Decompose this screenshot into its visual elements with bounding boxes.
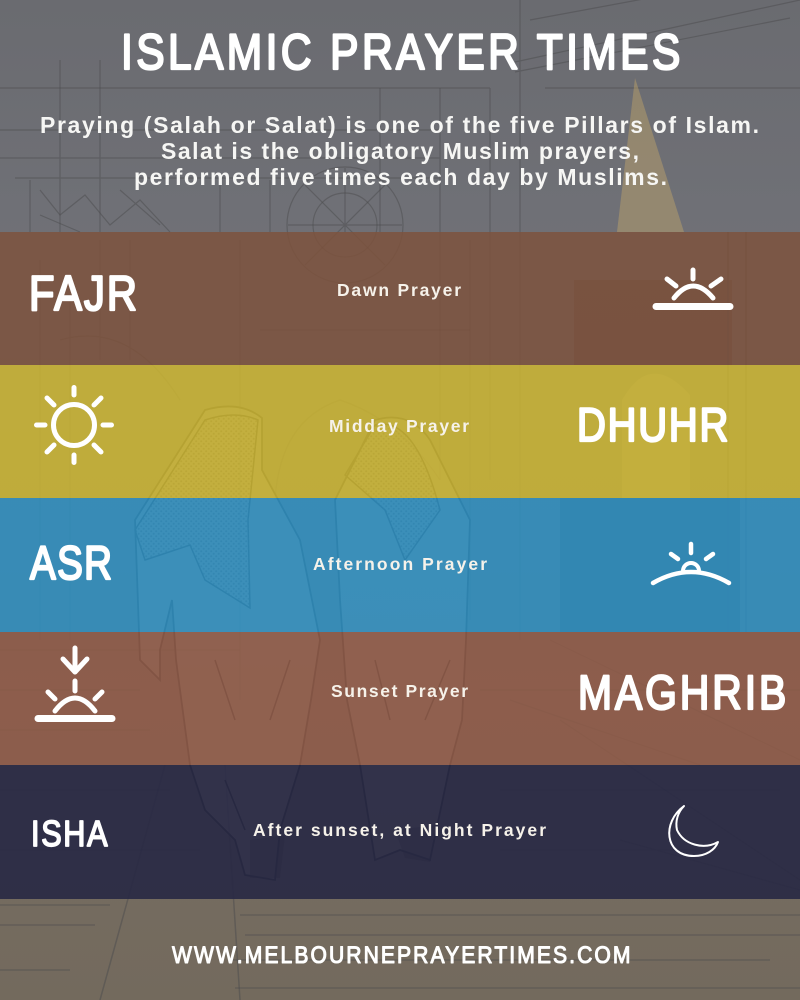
panel: Dhuhr bbox=[0, 365, 800, 498]
panel: Maghrib bbox=[0, 632, 800, 765]
heading: Asr: ASR bbox=[30, 537, 112, 590]
icon: crescent moon bbox=[669, 806, 718, 856]
panel: Asr bbox=[0, 498, 800, 632]
minaret spire bbox=[617, 78, 684, 232]
icon: sun bbox=[36, 388, 112, 462]
heading: Dhuhr: DHUHR bbox=[577, 400, 728, 452]
description: night prayer: After sunset, at Night Prayer bbox=[253, 820, 546, 840]
right figure bbox=[335, 418, 470, 860]
description: afternoon prayer: Afternoon Prayer bbox=[313, 554, 487, 574]
icon: sunset with arrow bbox=[38, 648, 112, 718]
description: dawn prayer: Dawn Prayer bbox=[337, 280, 461, 300]
title: ISLAMIC PRAYER TIMES bbox=[121, 24, 680, 80]
intro text bbox=[40, 112, 759, 190]
intro text: Praying (Salah or Salat) is one of the five Pillars of Islam. bbox=[40, 112, 759, 138]
description: sunset prayer: Sunset Prayer bbox=[331, 681, 468, 701]
heading: Isha: ISHA bbox=[31, 815, 108, 855]
heading: Maghrib: MAGHRIB bbox=[578, 667, 786, 720]
minaret tower bbox=[574, 280, 732, 365]
panel: Isha bbox=[0, 765, 800, 899]
description: midday prayer: Midday Prayer bbox=[329, 416, 469, 436]
icon: sunrise bbox=[656, 270, 730, 306]
icon: afternoon sun bbox=[653, 544, 729, 583]
panel: Fajr bbox=[0, 232, 800, 365]
heading: Fajr: FAJR bbox=[29, 266, 137, 321]
intro text: Salat is the obligatory Muslim prayers, bbox=[161, 138, 639, 164]
website address: WWW.MELBOURNEPRAYERTIMES.COM bbox=[172, 942, 630, 968]
left figure bbox=[135, 406, 320, 880]
intro text: performed five times each day by Muslims. bbox=[134, 164, 667, 190]
